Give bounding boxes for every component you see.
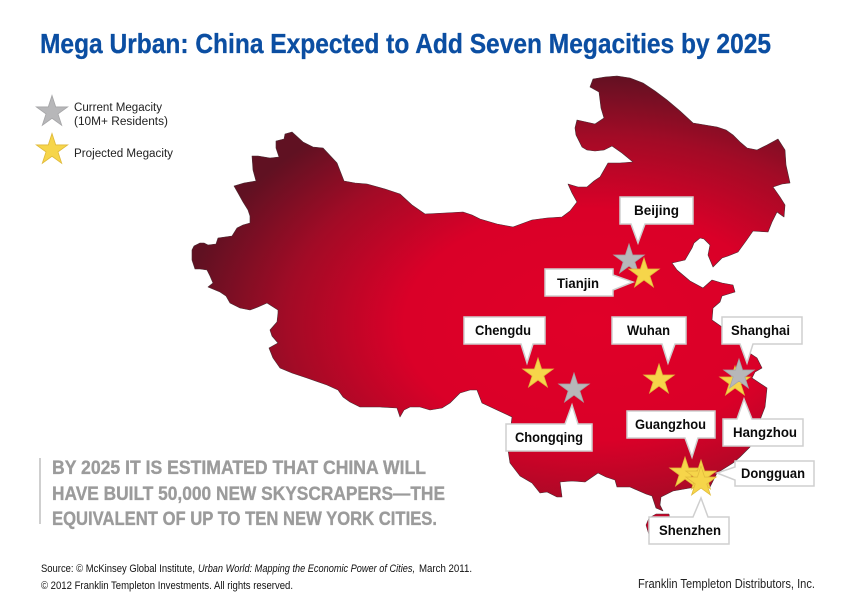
callout: Beijing <box>620 197 693 243</box>
map: China <box>192 76 790 538</box>
star: Chengdu <box>523 358 553 387</box>
callout: Hangzhou <box>723 399 803 446</box>
star: Tianjin <box>629 258 659 287</box>
icon: projected megacity star <box>36 134 68 163</box>
callout: Chengdu <box>464 317 545 363</box>
callout: Shenzhen: Shenzhen <box>659 522 721 538</box>
callout: Shanghai: Shanghai <box>731 322 790 338</box>
callout: Wuhan: Wuhan <box>627 322 670 338</box>
callout: Dongguan <box>717 461 814 486</box>
callout: Guangzhou: Guangzhou <box>635 416 706 432</box>
star: Chongqing <box>559 373 589 402</box>
callout: Shenzhen <box>649 498 729 544</box>
star: Hangzhou <box>720 366 750 395</box>
callout: Chengdu: Chengdu <box>475 322 531 338</box>
star: Shanghai <box>724 359 754 388</box>
Hainan island <box>646 514 672 538</box>
stars: yellow projected, grey current <box>523 244 754 495</box>
callout: Chongqing: Chongqing <box>515 429 583 445</box>
star: Guangzhou <box>670 457 700 486</box>
callout: Dongguan: Dongguan <box>741 465 805 481</box>
callout: Beijing: Beijing <box>634 202 679 218</box>
legend label: projected megacity: Projected Megacity <box>74 148 173 160</box>
callout: Shanghai <box>722 317 802 363</box>
pull quote: BY 2025 IT IS ESTIMATED THAT CHINA WILL <box>52 457 426 479</box>
title: Mega Urban: China Expected to Add Seven Megacities by 2025 <box>40 28 771 59</box>
star: Shenzhen <box>686 466 716 495</box>
source note: Source: © McKinsey Global Institute, <box>41 563 195 575</box>
pull quote <box>39 457 445 530</box>
source note: March 2011. <box>419 563 472 575</box>
star: Dongguan <box>686 460 716 489</box>
pull quote: HAVE BUILT 50,000 NEW SKYSCRAPERS—THE <box>52 483 445 505</box>
callout: Chongqing <box>506 405 592 451</box>
legend label: current megacity: (10M+ Residents) <box>74 116 168 128</box>
distributor credit: Franklin Templeton Distributors, Inc. <box>638 577 815 591</box>
callout: Tianjin <box>545 269 633 296</box>
pull quote: EQUIVALENT OF UP TO TEN NEW YORK CITIES. <box>52 508 437 530</box>
icon: current megacity star <box>36 96 68 125</box>
mainland outline <box>192 76 790 511</box>
callout: Tianjin: Tianjin <box>557 275 599 291</box>
star: Beijing <box>614 244 644 273</box>
callout: Guangzhou <box>627 411 715 457</box>
callout: Wuhan <box>612 317 686 363</box>
source note <box>41 563 472 592</box>
legend label: current megacity: Current Megacity <box>74 102 162 114</box>
star: Wuhan <box>644 364 674 393</box>
callout: Hangzhou: Hangzhou <box>733 424 797 440</box>
source note: © 2012 Franklin Templeton Investments. All rights reserved. <box>41 580 293 592</box>
source note: Urban World: Mapping the Economic Power of Cities, <box>198 563 415 575</box>
legend <box>36 96 173 163</box>
